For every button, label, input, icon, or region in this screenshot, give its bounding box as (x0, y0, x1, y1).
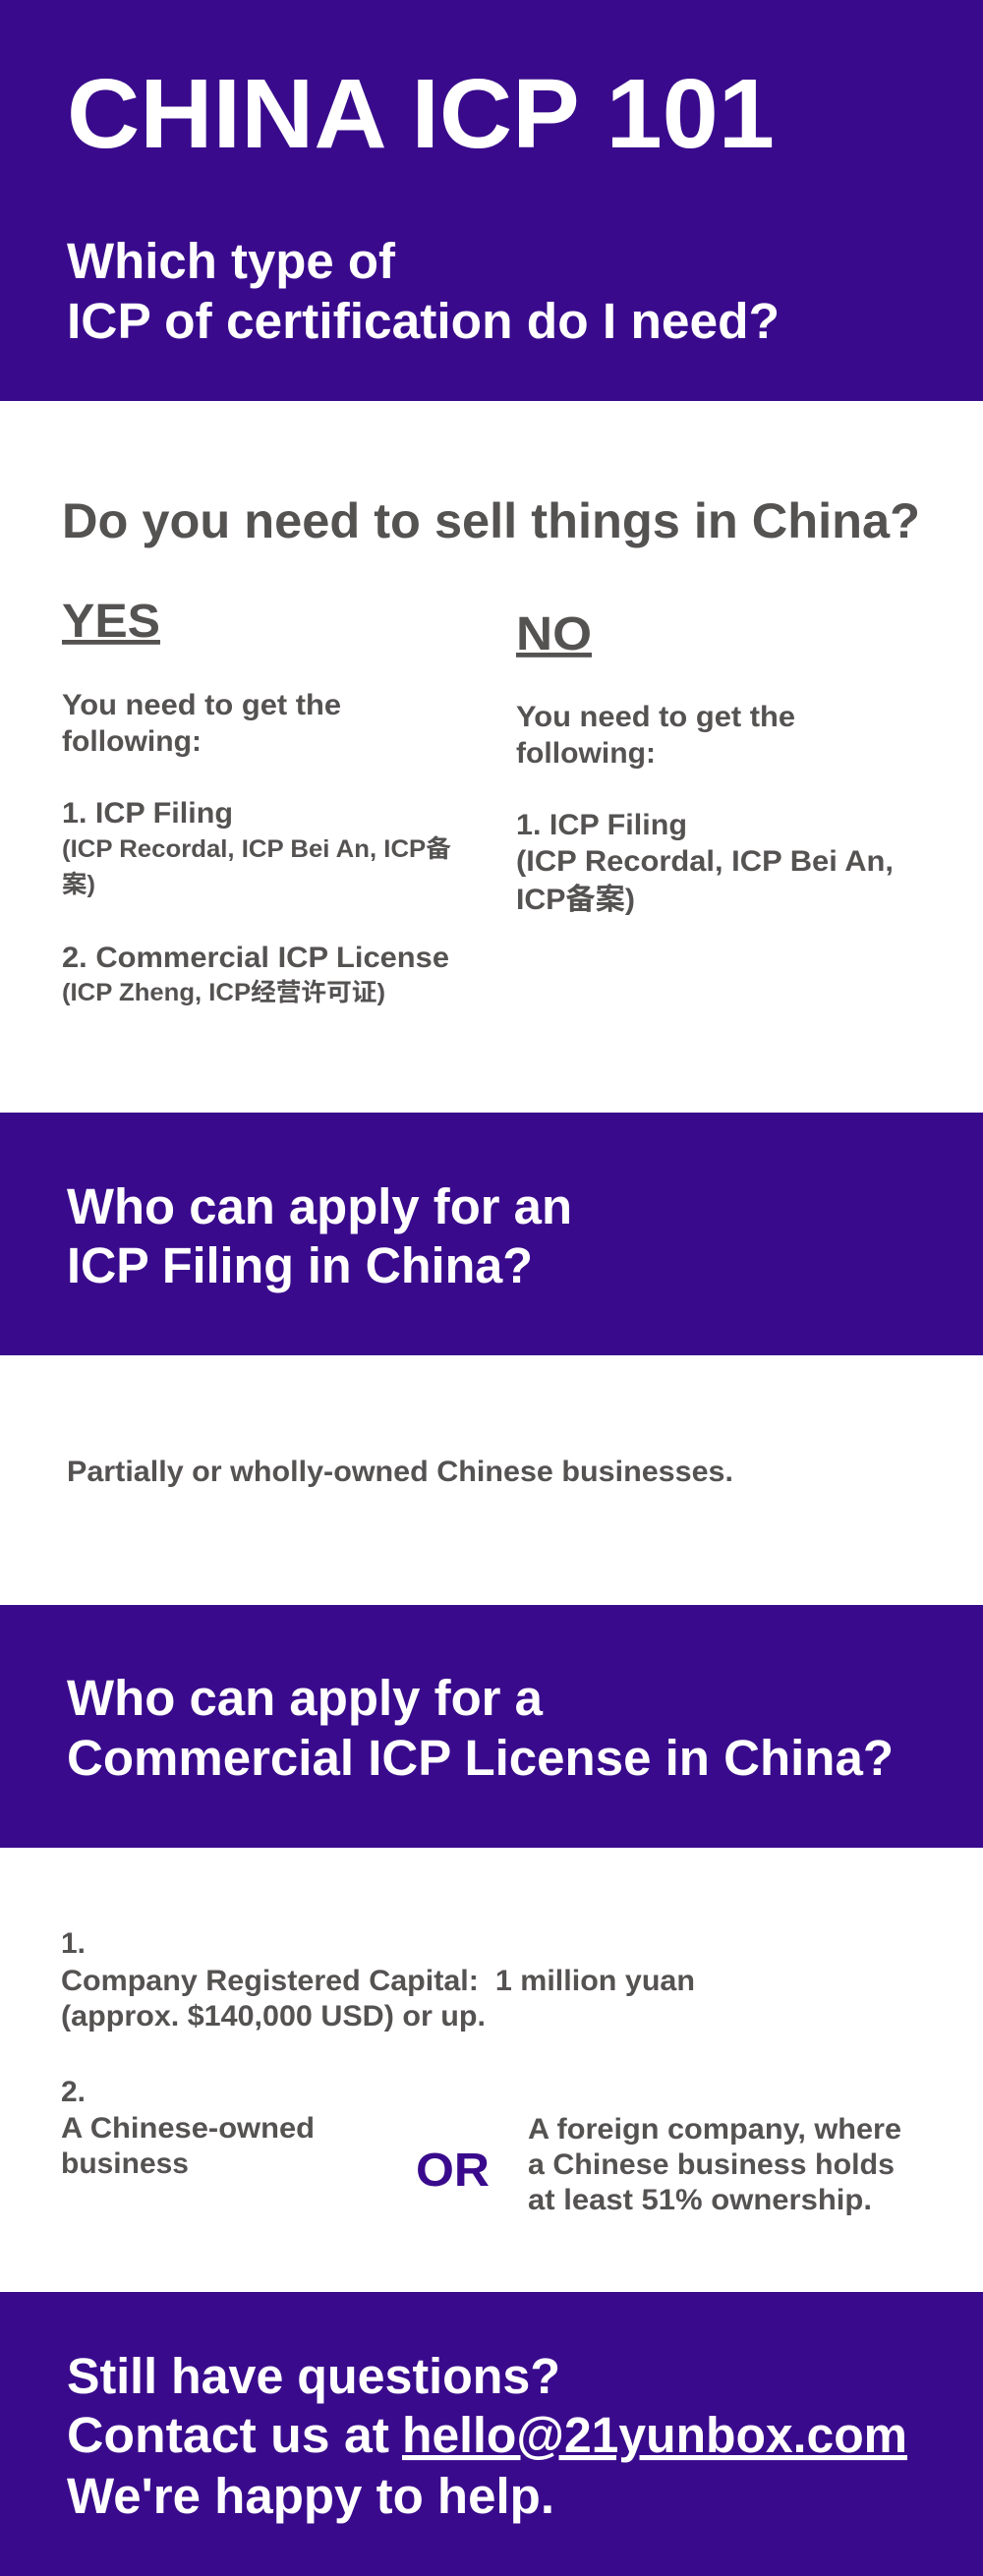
column: yes (62, 596, 451, 1006)
no item 1: ICP Filing: (ICP Recordal, ICP Bei An, (516, 845, 894, 878)
requirement 2: Chinese-owned business (61, 2076, 315, 2180)
contact text: Contact us at (67, 2407, 389, 2463)
requirement 2 alternative: foreign company: a Chinese business holds (528, 2148, 895, 2181)
requirement 2 alternative: foreign company: at least 51% ownership. (528, 2184, 872, 2216)
heading: commercial license applicants: Who can apply for a (67, 1670, 544, 1726)
yes heading: YES (62, 596, 160, 648)
heading: ICP filing applicants: Who can apply for an (67, 1178, 572, 1234)
yes item 2: Commercial ICP License: 2. Commercial ICP License (62, 942, 449, 974)
requirement 1: registered capital: (approx. $140,000 USD) or up. (61, 2000, 486, 2032)
yes intro text: following: (62, 725, 202, 758)
no heading: NO (516, 608, 592, 660)
title: CHINA ICP 101 (67, 59, 775, 169)
label: OR: OR (416, 2145, 490, 2197)
yes item 1: ICP Filing (62, 797, 451, 898)
contact text: Still have questions? (67, 2348, 560, 2404)
contact text (67, 2348, 907, 2524)
subtitle (67, 233, 780, 349)
yes intro text: You need to get the (62, 689, 341, 721)
heading: commercial license applicants (67, 1670, 894, 1786)
yes item 1: ICP Filing: (ICP Recordal, ICP Bei An, ICP备 (62, 835, 451, 863)
requirement 1: registered capital: 1. (61, 1927, 86, 1960)
requirement 2: Chinese-owned business: A Chinese-owned (61, 2112, 315, 2145)
panel: who can apply for ICP filing banner (0, 1113, 983, 1355)
no intro text: You need to get the (516, 701, 795, 733)
no item 1: ICP Filing: 1. ICP Filing (516, 809, 687, 841)
yes item 2: Commercial ICP License: (ICP Zheng, ICP经营许可证) (62, 979, 385, 1006)
subtitle: Which type of (67, 233, 396, 289)
panel: license requirements (61, 1927, 901, 2216)
requirement 1: registered capital: Company Registered Capital: 1 million yuan (61, 1965, 695, 1997)
requirement 1: registered capital (61, 1927, 695, 2032)
heading: commercial license applicants: Commercial ICP License in China? (67, 1730, 894, 1786)
no item 1: ICP Filing: ICP备案) (516, 884, 635, 916)
yes item 1: ICP Filing: 1. ICP Filing (62, 797, 233, 830)
panel: contact footer (0, 2292, 983, 2576)
column: no (516, 608, 894, 916)
heading: sell things question: Do you need to sell things in China? (62, 493, 920, 548)
no item 1: ICP Filing (516, 809, 894, 916)
requirement 2: Chinese-owned business: business (61, 2147, 189, 2180)
panel: header banner (0, 0, 983, 401)
yes item 2: Commercial ICP License (62, 942, 449, 1006)
requirement 2 alternative: foreign company (528, 2113, 901, 2216)
contact text: We're happy to help. (67, 2468, 554, 2524)
no intro text: following: (516, 737, 656, 770)
requirement 2 alternative: foreign company: A foreign company, where (528, 2113, 901, 2146)
yes item 1: ICP Filing: 案) (62, 871, 95, 898)
panel: who can apply for commercial license banner (0, 1605, 983, 1848)
contact text: hello@21yunbox.com (402, 2407, 907, 2463)
heading: ICP filing applicants: ICP Filing in China? (67, 1237, 533, 1293)
text: filing eligibility: Partially or wholly-owned Chinese businesses. (67, 1456, 733, 1488)
no intro text (516, 701, 795, 770)
requirement 2: Chinese-owned business: 2. (61, 2076, 86, 2108)
heading: ICP filing applicants (67, 1178, 572, 1293)
subtitle: ICP of certification do I need? (67, 293, 780, 349)
panel: do you need to sell (62, 493, 920, 1006)
yes intro text (62, 689, 341, 758)
